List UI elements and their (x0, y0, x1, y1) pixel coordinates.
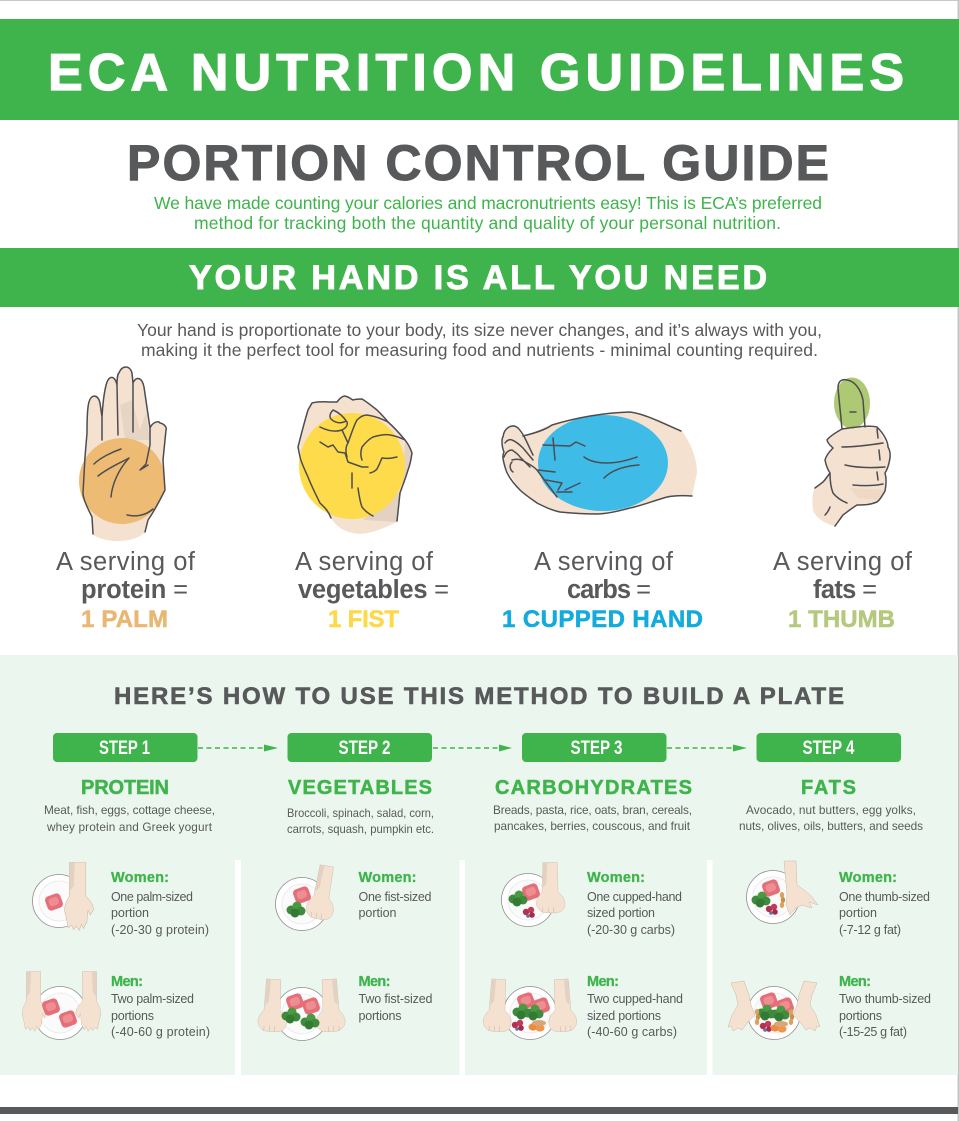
label: protein serving (56, 548, 196, 633)
plate: men carbs (483, 979, 577, 1040)
plate: women vegetables (276, 864, 341, 930)
text: women protein (111, 870, 209, 937)
step 4 badge: STEP 4 (802, 738, 855, 759)
text: women carbs: (-20-30 g carbs) (587, 923, 675, 937)
text: women vegetables: One fist-sized (358, 890, 432, 904)
label: carbs serving (502, 548, 703, 633)
label: fats serving (773, 548, 913, 633)
column 4 heading and foods: Avocado, nut butters, egg yolks, (746, 803, 916, 817)
title: ECA NUTRITION GUIDELINES (48, 44, 904, 102)
text: men vegetables: Men: (358, 974, 390, 990)
label: carbs serving: A serving of (534, 548, 674, 576)
text: men protein: Men: (111, 974, 143, 990)
text: women carbs: sized portion (587, 906, 655, 920)
step 4 badge (756, 733, 901, 762)
text: women fats: portion (839, 906, 877, 920)
text: men vegetables (358, 974, 433, 1023)
step 1 badge: STEP 1 (99, 738, 150, 759)
icon: palm (79, 367, 166, 541)
text: women carbs: Women: (587, 870, 645, 886)
arrow: step 1 to 2 (198, 744, 278, 752)
column 3 heading and foods: pancakes, berries, couscous, and fruit (494, 819, 691, 833)
column 1 heading and foods: whey protein and Greek yogurt (46, 820, 213, 834)
text: men protein: portions (111, 1009, 154, 1023)
label: protein serving: A serving of (56, 548, 196, 576)
column 1 heading and foods (44, 777, 215, 834)
column 4 heading and foods (739, 777, 923, 833)
plate: men protein (22, 972, 101, 1040)
text: men carbs: Men: (587, 974, 619, 990)
icon: fist (298, 396, 412, 534)
icon: thumb (812, 378, 890, 526)
label: vegetables serving (295, 548, 449, 633)
label: fats serving: fats = (813, 576, 877, 604)
text: women protein: One palm-sized (111, 890, 193, 904)
intro text: method for tracking both the quantity and quality of your personal nutrition. (194, 213, 781, 233)
column 1 heading and foods: PROTEIN (81, 777, 169, 799)
label: carbs serving: 1 CUPPED HAND (502, 606, 703, 633)
footer bar (0, 1107, 958, 1114)
heading: portion control guide: PORTION CONTROL GUIDE (127, 135, 829, 191)
label: vegetables serving: vegetables = (298, 576, 449, 604)
plate: women protein (32, 862, 94, 930)
text: men protein: Two palm-sized (111, 992, 194, 1006)
panel heading: HERE’S HOW TO USE THIS METHOD TO BUILD A PLATE (114, 683, 844, 710)
text: women carbs: One cupped-hand (587, 890, 682, 904)
text: women protein: (-20-30 g protein) (111, 923, 209, 937)
text: men fats (839, 974, 931, 1039)
plate: women fats (746, 861, 818, 924)
text: women fats (839, 870, 930, 937)
column 2 heading and foods: Broccoli, spinach, salad, corn, (287, 806, 434, 820)
label: vegetables serving: A serving of (295, 548, 434, 576)
column 4 heading and foods: FATS (801, 777, 856, 799)
text: women fats: Women: (839, 870, 897, 886)
text: women fats: (-7-12 g fat) (839, 923, 901, 937)
text: women vegetables (358, 870, 432, 920)
text: men vegetables: Two fist-sized (358, 992, 433, 1006)
label: fats serving: 1 THUMB (788, 606, 895, 633)
text: men protein (111, 974, 210, 1039)
label: fats serving: A serving of (773, 548, 913, 576)
icon: cupped hand (502, 412, 697, 514)
plate: men vegetables (257, 979, 346, 1040)
text: men carbs: Two cupped-hand (587, 992, 683, 1006)
column 1 heading and foods: Meat, fish, eggs, cottage cheese, (44, 803, 215, 817)
arrow: step 2 to 3 (433, 744, 512, 752)
text: men fats: Men: (839, 974, 871, 990)
explanation text: Your hand is proportionate to your body, its size never changes, and it’s always with you, (137, 320, 822, 340)
text: men carbs: sized portions (587, 1009, 661, 1023)
section band (0, 248, 959, 307)
column 2 heading and foods: carrots, squash, pumpkin etc. (287, 822, 434, 836)
step 3 badge: STEP 3 (570, 738, 622, 759)
column 3 heading and foods: Breads, pasta, rice, oats, bran, cereals, (493, 803, 692, 817)
plate: women carbs (502, 862, 565, 926)
column 3 heading and foods: CARBOHYDRATES (495, 777, 692, 799)
step 2 badge: STEP 2 (338, 738, 390, 759)
explanation text (137, 320, 822, 360)
text: women protein: portion (111, 906, 149, 920)
step 2 badge (288, 733, 432, 762)
label: protein serving: protein = (81, 576, 188, 604)
text: men fats: (-15-25 g fat) (839, 1025, 907, 1039)
text: women fats: One thumb-sized (839, 890, 930, 904)
intro text: We have made counting your calories and macronutrients easy! This is ECA’s preferred (154, 193, 822, 213)
text: men carbs: (-40-60 g carbs) (587, 1025, 677, 1039)
label: vegetables serving: 1 FIST (328, 606, 399, 633)
label: protein serving: 1 PALM (81, 606, 168, 633)
arrow: step 3 to 4 (667, 744, 747, 752)
header band (0, 19, 959, 120)
text: women vegetables: portion (358, 906, 397, 920)
explanation text: making it the perfect tool for measuring food and nutrients - minimal counting required. (141, 340, 818, 360)
text: women carbs (587, 870, 682, 937)
column 3 heading and foods (493, 777, 692, 833)
step 1 badge (53, 733, 198, 762)
column 2 heading and foods: VEGETABLES (288, 777, 432, 799)
panel: build a plate (0, 655, 958, 1075)
plate: men fats (728, 981, 820, 1040)
section heading: YOUR HAND IS ALL YOU NEED (189, 259, 767, 297)
text: men vegetables: portions (358, 1009, 402, 1023)
text: women vegetables: Women: (358, 870, 416, 886)
column 2 heading and foods (287, 777, 434, 836)
column 4 heading and foods: nuts, olives, oils, butters, and seeds (739, 819, 923, 833)
text: men fats: portions (839, 1009, 882, 1023)
label: carbs serving: carbs = (567, 576, 651, 604)
text: men fats: Two thumb-sized (839, 992, 931, 1006)
text: women protein: Women: (111, 870, 169, 886)
text: men carbs (587, 974, 683, 1039)
step 3 badge (522, 733, 666, 762)
intro text (154, 193, 822, 233)
text: men protein: (-40-60 g protein) (111, 1025, 210, 1039)
